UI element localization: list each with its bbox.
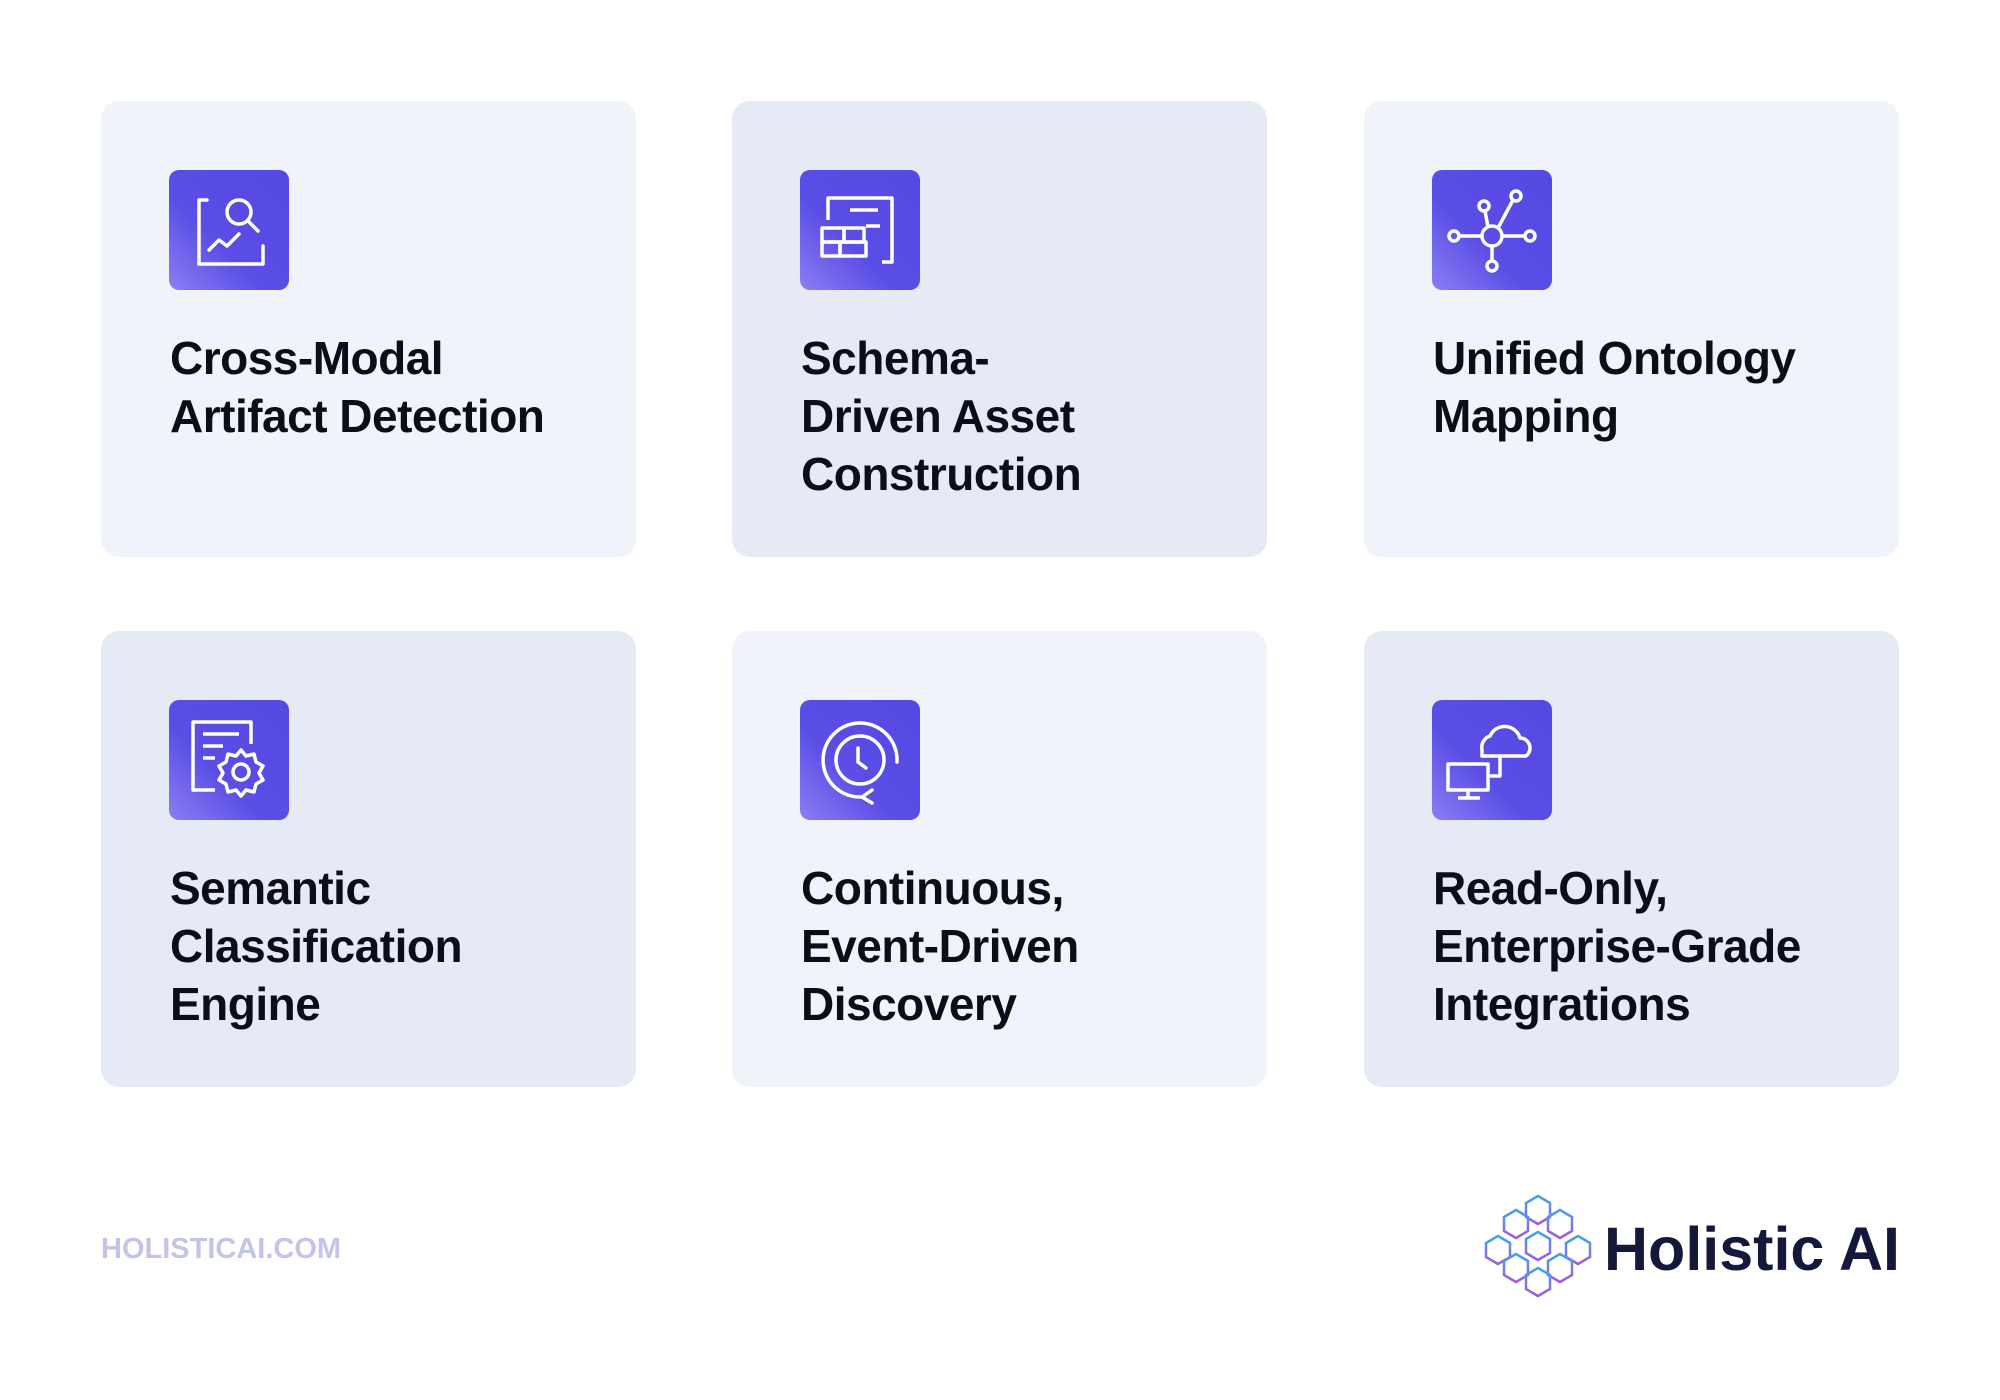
title: Semantic [170, 862, 371, 914]
title: Schema- [801, 332, 989, 384]
title [801, 862, 1079, 1030]
logo text: Holistic AI [1604, 1215, 1900, 1283]
card: continuous [732, 631, 1267, 1087]
title: Read-Only, [1433, 862, 1667, 914]
title: Artifact Detection [170, 390, 544, 442]
title: Integrations [1433, 978, 1690, 1030]
title: Mapping [1433, 390, 1619, 442]
icon: bricks [800, 170, 920, 290]
card: schema [732, 101, 1267, 557]
icon: clock cycle [800, 700, 920, 820]
logo [1484, 1194, 1900, 1298]
footer url: HOLISTICAI.COM [101, 1233, 341, 1265]
title: Classification [170, 920, 462, 972]
title: Enterprise-Grade [1433, 920, 1801, 972]
title: Construction [801, 448, 1081, 500]
title: Discovery [801, 978, 1016, 1030]
card: integrations [1364, 631, 1899, 1087]
title [801, 332, 1081, 500]
title: Engine [170, 978, 320, 1030]
title: Cross-Modal [170, 332, 443, 384]
title: Driven Asset [801, 390, 1075, 442]
title: Event-Driven [801, 920, 1079, 972]
icon: doc gear [169, 700, 289, 820]
title [1433, 862, 1801, 1030]
title [170, 862, 462, 1030]
icon: magnifier chart [169, 170, 289, 290]
icon: cloud monitor [1432, 700, 1552, 820]
title [1433, 332, 1796, 442]
icon: hexagon cluster [1484, 1194, 1592, 1298]
title: Continuous, [801, 862, 1064, 914]
card: semantic [101, 631, 636, 1087]
card: ontology [1364, 101, 1899, 557]
title [170, 332, 544, 442]
card: cross-modal [101, 101, 636, 557]
title: Unified Ontology [1433, 332, 1796, 384]
icon: network [1432, 170, 1552, 290]
